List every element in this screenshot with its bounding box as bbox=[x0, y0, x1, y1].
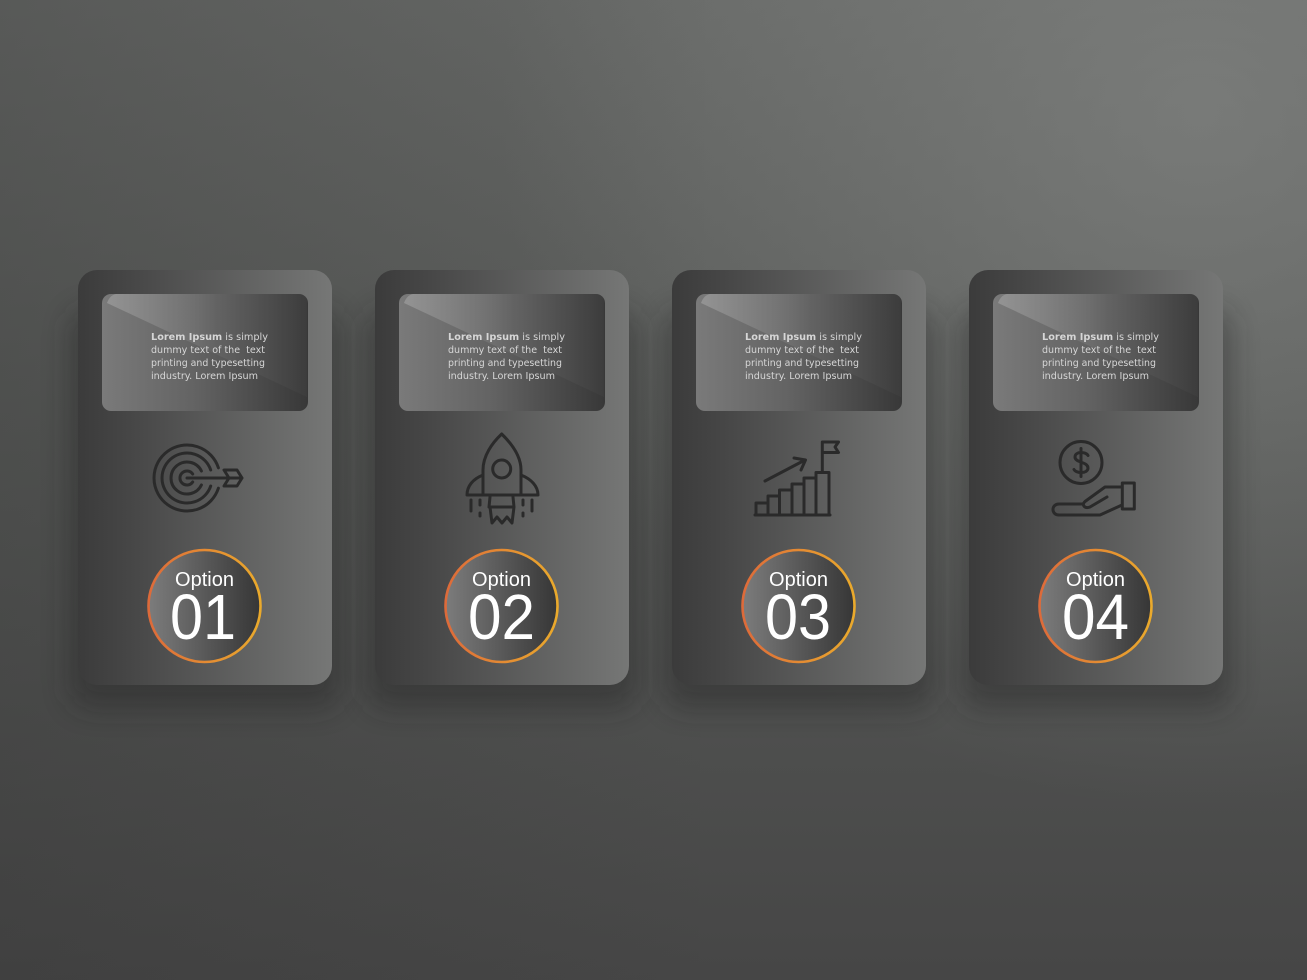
badge 02: 02 bbox=[468, 581, 535, 653]
badge 03: Option bbox=[769, 569, 828, 591]
text window 01: printing and typesetting bbox=[151, 358, 265, 369]
panel: option 04 bbox=[961, 270, 1231, 708]
text window 03 bbox=[696, 294, 902, 411]
text window 04: industry. Lorem Ipsum bbox=[1042, 371, 1149, 382]
text window 04 bbox=[993, 294, 1199, 411]
text window 02: dummy text of the text bbox=[448, 345, 562, 356]
badge 01: Option bbox=[175, 569, 234, 591]
text window 03: dummy text of the text bbox=[745, 345, 859, 356]
badge 04 bbox=[1040, 550, 1152, 662]
text window 04: Lorem Ipsum is simply bbox=[1042, 332, 1159, 343]
badge 03: 03 bbox=[765, 581, 831, 653]
text window 01 bbox=[102, 294, 308, 411]
text window 01: dummy text of the text bbox=[151, 345, 265, 356]
text window 02: printing and typesetting bbox=[448, 358, 562, 369]
text window 01: industry. Lorem Ipsum bbox=[151, 371, 258, 382]
badge 04: Option bbox=[1066, 569, 1125, 591]
text window 04: printing and typesetting bbox=[1042, 358, 1156, 369]
text window 04: dummy text of the text bbox=[1042, 345, 1156, 356]
badge 04: 04 bbox=[1062, 581, 1129, 653]
badge 01: 01 bbox=[170, 581, 236, 653]
text window 03: Lorem Ipsum is simply bbox=[745, 332, 862, 343]
badge 02 bbox=[446, 550, 558, 662]
text window 02 bbox=[399, 294, 605, 411]
icon: target with arrow bbox=[154, 445, 242, 511]
text window 03: printing and typesetting bbox=[745, 358, 859, 369]
panel: option 01 bbox=[70, 270, 340, 708]
panel: option 02 bbox=[367, 270, 637, 708]
text window 02: industry. Lorem Ipsum bbox=[448, 371, 555, 382]
icon: rising bar chart with flag bbox=[755, 442, 838, 515]
text window 03: industry. Lorem Ipsum bbox=[745, 371, 852, 382]
badge 03 bbox=[742, 550, 854, 662]
badge 02: Option bbox=[472, 569, 531, 591]
text window 01: Lorem Ipsum is simply bbox=[151, 332, 268, 343]
text window 02: Lorem Ipsum is simply bbox=[448, 332, 565, 343]
icon: hand holding dollar coin bbox=[1053, 442, 1134, 515]
panel: option 03 bbox=[664, 270, 934, 708]
icon: rocket bbox=[467, 434, 538, 523]
badge 01 bbox=[148, 550, 260, 662]
